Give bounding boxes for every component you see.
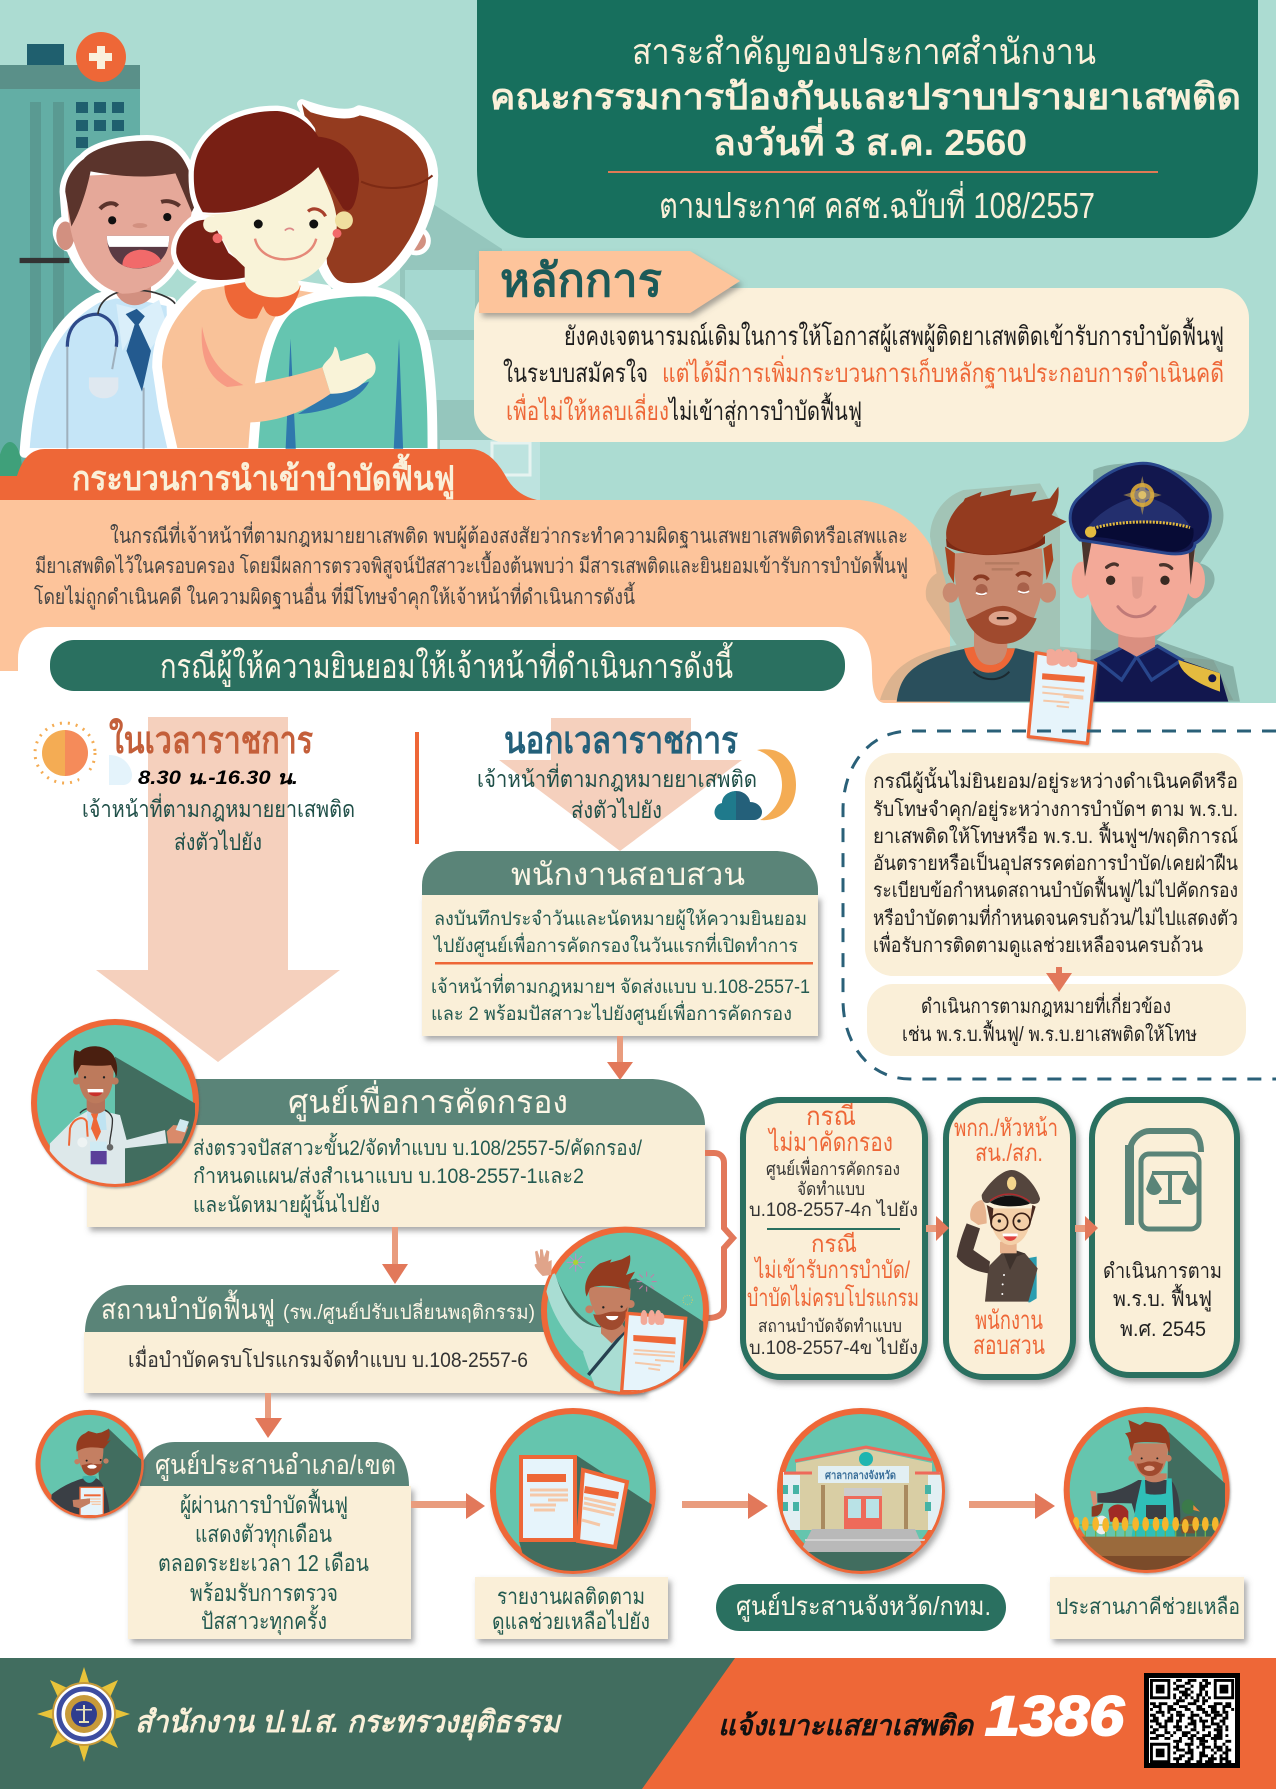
arrow: refusal to legal action [1046, 967, 1072, 992]
panel: follow-up report: ดูแลช่วยเหลือไปยัง [492, 1609, 650, 1635]
panel: case not attending screening: บำบัดไม่ครบโปรแกรม [747, 1284, 919, 1312]
text: outside office hours [477, 720, 757, 823]
title lines [490, 31, 1241, 226]
footer hotline label: แจ้งเบาะแสยาเสพติด [718, 1710, 975, 1741]
police officer [1070, 463, 1228, 702]
title lines: ลงวันที่ 3 ส.ค. 2560 [713, 117, 1027, 163]
arrow: screening to rehab [382, 1227, 408, 1284]
panel: responsible officer: สน./สภ. [975, 1140, 1043, 1167]
screening text [193, 1133, 642, 1218]
panel: responsible officer: พกก./หัวหน้า [954, 1115, 1058, 1142]
background: mint header area [0, 0, 1276, 703]
intro text: มียาเสพติดไว้ในครอบครอง โดยมีผลการตรวจพิสูจน์ปัสสาวะเบื้องต้นพบว่า มีสารเสพติดและยินยอมเข้ารับการบำบัดฟื้นฟู [35, 551, 908, 579]
panel: investigator [422, 851, 818, 1036]
banner: provincial coordination centre: ศูนย์ประสานจังหวัด/กทม. [736, 1591, 991, 1622]
panel: case not attending screening: ศูนย์เพื่อการคัดกรอง [766, 1156, 900, 1180]
woman head and arm [176, 111, 376, 423]
intro text: ในกรณีที่เจ้าหน้าที่ตามกฎหมายยาเสพติด พบผู้ต้องสงสัยว่ากระทำความผิดฐานเสพยาเสพติดหรือเสพและ [110, 521, 908, 549]
text: outside office hours: นอกเวลาราชการ [504, 720, 738, 762]
panel: act enforcement: ดำเนินการตาม [1103, 1260, 1222, 1283]
icon: documents circle [493, 1411, 660, 1580]
woman [157, 277, 326, 453]
investigator text: ลงบันทึกประจำวันและนัดหมายผู้ให้ความยินยอม [434, 908, 807, 930]
text: outside office hours: เจ้าหน้าที่ตามกฎหมายยาเสพติด [477, 763, 757, 792]
heading: admission process [0, 449, 537, 500]
panel: follow-up report: รายงานผลติดตาม [497, 1584, 645, 1609]
icon: farmer circle [1060, 1410, 1233, 1579]
refusal text: เพื่อรับการติดตามดูแลช่วยเหลือจนครบถ้วน [873, 931, 1203, 958]
heading tag: principles: หลักการ [500, 254, 662, 306]
panel: follow-up report [475, 1577, 668, 1639]
arrow: district centre to report [411, 1493, 485, 1519]
panel: refusal conditions [865, 753, 1243, 976]
panel: principles [474, 288, 1249, 442]
icon: law book [1125, 1131, 1201, 1229]
investigator text: เจ้าหน้าที่ตามกฎหมายฯ จัดส่งแบบ บ.108-2557-1 [431, 973, 810, 998]
intro text: โดยไม่ถูกดำเนินคดี ในความผิดฐานอื่น ที่มีโทษจำคุกให้เจ้าหน้าที่ดำเนินการดังนี้ [34, 582, 635, 610]
panel: responsible officer [946, 1100, 1073, 1377]
background: white lower area [0, 627, 1276, 1789]
banner: consent case heading: กรณีผู้ให้ความยินยอมให้เจ้าหน้าที่ดำเนินการดังนี้ [160, 642, 734, 687]
district text: ปัสสาวะทุกครั้ง [201, 1605, 327, 1635]
panel: act enforcement: พ.ศ. 2545 [1120, 1318, 1206, 1341]
text: during office hours [82, 718, 355, 855]
icon: man with raised arm circle [535, 1230, 706, 1393]
panel: district coordination centre: ศูนย์ประสานอำเภอ/เขต [155, 1449, 396, 1481]
text: during office hours: ในเวลาราชการ [109, 718, 313, 762]
screening text: กำหนดแผน/ส่งสำเนาแบบ บ.108-2557-1และ2 [193, 1165, 584, 1188]
clipboard [1028, 649, 1096, 743]
panel: case not attending screening: บ.108-2557-4ข ไปยัง [749, 1337, 918, 1359]
district text: ตลอดระยะเวลา 12 เดือน [158, 1550, 369, 1576]
panel: case not attending screening [743, 1100, 925, 1377]
panel: legal action: เช่น พ.ร.บ.ฟื้นฟู/ พ.ร.บ.ยาเสพติดให้โทษ [902, 1020, 1197, 1047]
panel: civil society [1050, 1577, 1244, 1639]
district text: แสดงตัวทุกเดือน [195, 1521, 332, 1548]
intro text [34, 521, 908, 610]
panel: screening centre [87, 1079, 705, 1227]
footer hotline number: 1386 [985, 1684, 1125, 1747]
icon: saluting officer [957, 1170, 1040, 1302]
illustration: patient and police officer [880, 463, 1240, 743]
investigator text: ไปยังศูนย์เพื่อการคัดกรองในวันแรกที่เปิดทำการ [432, 932, 798, 957]
panel: act enforcement [1092, 1100, 1237, 1375]
icon: moon and cloud [714, 749, 796, 820]
title lines: ตามประกาศ คสช.ฉบับที่ 108/2557 [659, 181, 1095, 226]
panel: responsible officer: สอบสวน [973, 1330, 1045, 1360]
sign: provincial hall [818, 1466, 909, 1483]
principles text: เพื่อไม่ให้หลบเลี่ยง [506, 393, 669, 426]
text: outside office hours: ส่งตัวไปยัง [571, 797, 662, 823]
district text: ผู้ผ่านการบำบัดฟื้นฟู [180, 1489, 348, 1519]
panel: rehab facility: (รพ./ศูนย์ปรับเปลี่ยนพฤติกรรม) [283, 1298, 535, 1325]
panel: rehab facility [84, 1285, 644, 1393]
shadow silhouettes [880, 483, 1233, 700]
icon: sun [35, 723, 132, 785]
investigator text [431, 908, 810, 1025]
heading: admission process: กระบวนการนำเข้าบำบัดฟื้นฟู [72, 453, 455, 500]
icon: hospital plus sign [76, 32, 126, 82]
banner: consent case heading [50, 640, 845, 691]
screening text: และนัดหมายผู้นั้นไปยัง [193, 1190, 380, 1218]
district text [158, 1489, 369, 1635]
principles text: ไม่เข้าสู่การบำบัดฟื้นฟู [667, 392, 862, 427]
text: during office hours: 8.30 น.-16.30 น. [138, 768, 298, 789]
QR code [1144, 1673, 1240, 1768]
panel: case not attending screening: ไม่มาคัดกรอง [767, 1127, 893, 1157]
arrow: not attending to officer [926, 1216, 949, 1241]
panel: case not attending screening: ไม่เข้ารับการบำบัด/ [753, 1256, 910, 1284]
illustration: doctor, woman and patient [20, 104, 433, 453]
refusal text: ยาเสพติดให้โทษหรือ พ.ร.บ. ฟื้นฟูฯ/พฤติการณ์ [873, 822, 1238, 849]
icon: doctor portrait circle [34, 1022, 196, 1185]
text: during office hours: ส่งตัวไปยัง [174, 829, 262, 855]
panel: legal action [867, 984, 1246, 1056]
panel: case not attending screening: สถานบำบัดจัดทำแบบ [758, 1316, 902, 1336]
refusal text: รับโทษจำคุก/อยู่ระหว่างการบำบัดฯ ตาม พ.ร.บ. [873, 798, 1238, 822]
footer agency name: สำนักงาน ป.ป.ส. กระทรวงยุติธรรม [135, 1706, 562, 1741]
panel: rehab facility: สถานบำบัดฟื้นฟู [101, 1289, 275, 1327]
panel: case not attending screening: บ.108-2557-4ก ไปยัง [749, 1199, 918, 1221]
panel: district coordination centre [128, 1442, 411, 1639]
title lines: สาระสำคัญของประกาศสำนักงาน [632, 31, 1096, 72]
patient [897, 487, 1067, 702]
panel: case not attending screening: กรณี [811, 1231, 857, 1258]
panel: screening centre: ศูนย์เพื่อการคัดกรอง [288, 1080, 568, 1122]
banner: provincial coordination centre [716, 1584, 1006, 1631]
arrow: bracket to non-attendance cases [705, 1153, 733, 1318]
principles text [503, 317, 1224, 427]
arrow: after-hours down arrow [499, 718, 742, 851]
panel: rehab facility: เมื่อบำบัดครบโปรแกรมจัดทำแบบ บ.108-2557-6 [128, 1345, 528, 1372]
district text: พร้อมรับการตรวจ [190, 1580, 338, 1606]
heading tag: principles [479, 251, 740, 313]
investigator text: และ 2 พร้อมปัสสาวะไปยังศูนย์เพื่อการคัดกรอง [431, 1000, 792, 1025]
arrow: office-hours large down arrow [96, 717, 340, 1062]
panel: main title [477, 0, 1258, 238]
principles text: ในระบบสมัครใจ [503, 358, 648, 388]
title lines: คณะกรรมการป้องกันและปราบปรามยาเสพติด [490, 76, 1241, 117]
panel: legal action: ดำเนินการตามกฎหมายที่เกี่ยวข้อง [921, 992, 1171, 1018]
arrow: province centre to civil society [969, 1493, 1055, 1519]
text: during office hours: เจ้าหน้าที่ตามกฎหมายยาเสพติด [82, 793, 355, 822]
panel: case not attending screening: จัดทำแบบ [797, 1179, 865, 1199]
panel: civil society: ประสานภาคีช่วยเหลือ [1056, 1594, 1240, 1619]
footer [0, 1658, 1276, 1789]
icon: man with form circle [38, 1412, 143, 1518]
panel: act enforcement: พ.ร.บ. ฟื้นฟู [1113, 1284, 1212, 1312]
panel: responsible officer: พนักงาน [975, 1305, 1043, 1335]
icon: provincial hall circle [780, 1411, 945, 1582]
panel: refusal dashed frame [843, 731, 1276, 1079]
doctor [20, 141, 196, 453]
refusal text [873, 767, 1238, 958]
arrow: report to province centre [682, 1493, 768, 1519]
refusal text: กรณีผู้นั้นไม่ยินยอม/อยู่ระหว่างดำเนินคดีหรือ [873, 767, 1238, 794]
arrow: rehab to district centre [255, 1393, 282, 1438]
panel: investigator: พนักงานสอบสวน [511, 857, 745, 892]
man seen from the back [253, 104, 433, 453]
panel: case not attending screening: กรณี [806, 1101, 856, 1131]
arrow: investigator to screening centre [607, 1036, 633, 1080]
background: faded buildings [0, 44, 540, 500]
arrow: officer to act [1075, 1216, 1098, 1241]
refusal text: อันตรายหรือเป็นอุปสรรคต่อการบำบัด/เคยฝ่าฝืน [873, 850, 1238, 876]
panel: admission process intro [0, 500, 950, 703]
screening text: ส่งตรวจปัสสาวะขั้น2/จัดทำแบบ บ.108/2557-5/คัดกรอง/ [193, 1133, 642, 1160]
icon: ONCB emblem [37, 1667, 130, 1762]
sign: provincial hall: ศาลากลางจังหวัด [825, 1469, 896, 1482]
